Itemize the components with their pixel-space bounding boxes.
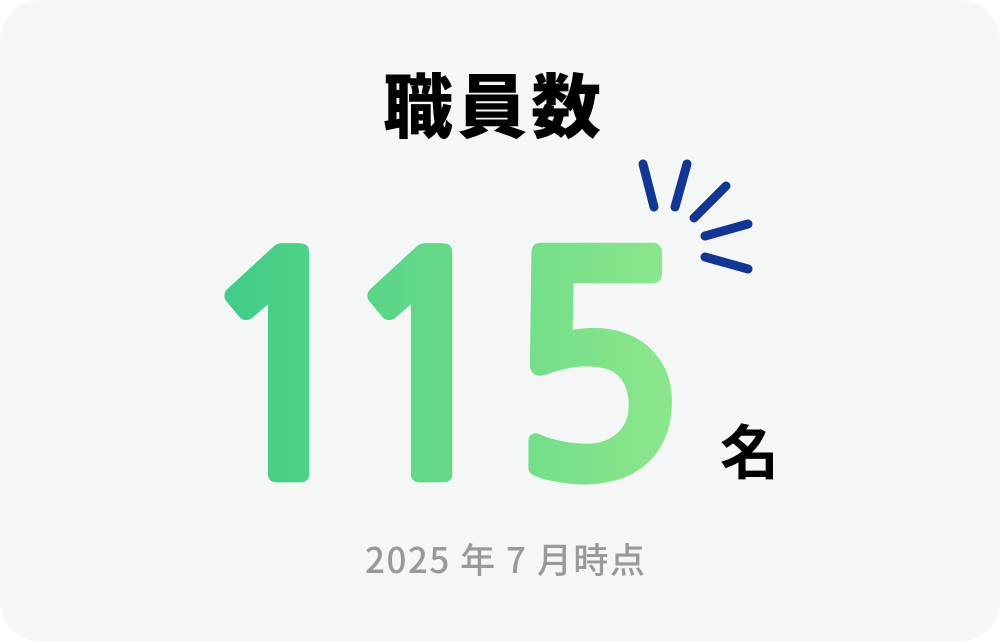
- title: 職員数: [383, 52, 601, 153]
- big number: 115: 115: [190, 223, 687, 523]
- unit label: 名: [720, 406, 779, 491]
- icon: emphasis burst lines: [643, 164, 748, 269]
- footnote: date: 2025 年 7 月時点: [365, 533, 646, 584]
